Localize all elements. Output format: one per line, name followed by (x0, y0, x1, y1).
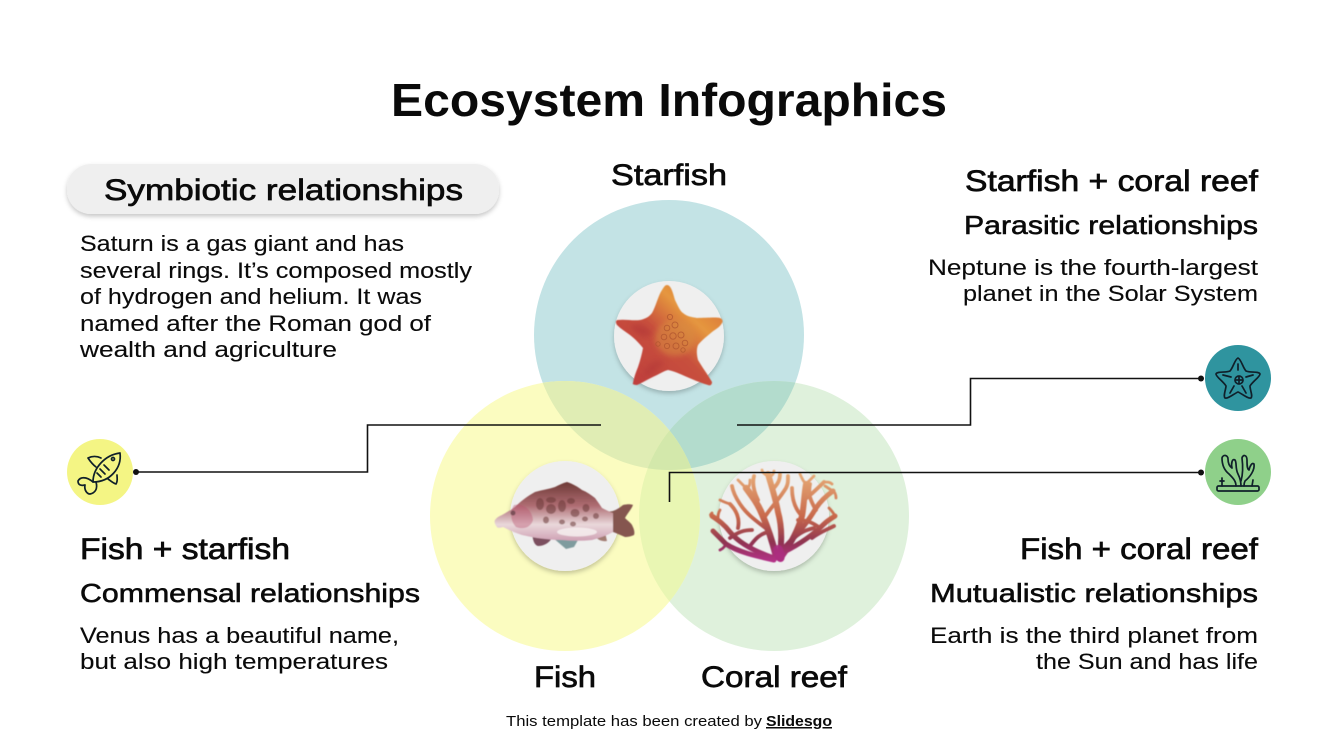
tail (604, 504, 634, 537)
base (779, 557, 780, 558)
icon: starfish (1205, 345, 1271, 411)
label: fish: Fish (534, 661, 596, 694)
illustration: fish (495, 461, 634, 571)
body text: planet in the Solar System (963, 281, 1258, 306)
fine tips (710, 470, 836, 550)
panel: fish + coral reef (930, 533, 1259, 674)
overlap: starfish and coral reef (670, 381, 796, 468)
label: coral reef: Coral reef (701, 661, 848, 694)
pill heading: Symbiotic relationships (104, 174, 463, 207)
illustration: coral reef (710, 461, 836, 571)
heading: Fish + coral reef (1020, 533, 1259, 566)
body text: Neptune is the fourth-largest (928, 255, 1259, 280)
circle: starfish (534, 200, 804, 470)
body text (928, 255, 1259, 306)
icon: coral reef (1205, 439, 1271, 505)
connector: fish + coral reef (670, 472, 1201, 502)
body text: named after the Roman god of (80, 311, 432, 336)
secondary branches (730, 474, 834, 546)
title: Ecosystem Infographics (391, 74, 947, 126)
body text: Venus has a beautiful name, (80, 623, 399, 648)
circle: fish (430, 381, 700, 651)
subheading: Commensal relationships (80, 578, 420, 608)
connector dot: top right (1198, 376, 1204, 382)
body text: of hydrogen and helium. It was (80, 284, 422, 309)
body (495, 482, 613, 541)
icon: fish (67, 439, 133, 505)
overlap: fish and coral reef (639, 432, 700, 602)
subheading: Mutualistic relationships (930, 578, 1258, 608)
body text: Earth is the third planet from (930, 623, 1258, 648)
panel: starfish + coral reef (928, 165, 1259, 306)
overlap: starfish and fish (543, 381, 670, 468)
body text (930, 623, 1258, 674)
body text: the Sun and has life (1036, 649, 1258, 674)
body text (79, 231, 473, 362)
footer credit: This template has been created by (506, 713, 763, 730)
connector: fish + starfish (136, 425, 601, 472)
body text: wealth and agriculture (79, 337, 337, 362)
body text: Saturn is a gas giant and has (80, 231, 404, 256)
body text (80, 623, 399, 674)
illustration: starfish (614, 281, 724, 391)
connector: starfish + coral reef (737, 378, 1201, 425)
fins (552, 537, 578, 549)
heading: Fish + starfish (80, 533, 290, 566)
connector dot: left (133, 469, 139, 475)
subheading: Parasitic relationships (964, 210, 1258, 240)
overlap: all three (648, 431, 691, 470)
pill heading (67, 164, 499, 214)
label: starfish: Starfish (611, 159, 727, 192)
body text: several rings. It’s composed mostly (80, 258, 473, 283)
trunk branches (746, 488, 776, 556)
circle: coral reef (639, 381, 909, 651)
panel: fish + starfish (80, 533, 420, 674)
venn diagram (430, 200, 909, 651)
connector dot: bottom right (1198, 470, 1204, 476)
footer credit: Slidesgo (766, 713, 832, 730)
heading: Starfish + coral reef (965, 165, 1259, 198)
panel: symbiotic relationships (67, 164, 499, 362)
body text: but also high temperatures (80, 649, 388, 674)
